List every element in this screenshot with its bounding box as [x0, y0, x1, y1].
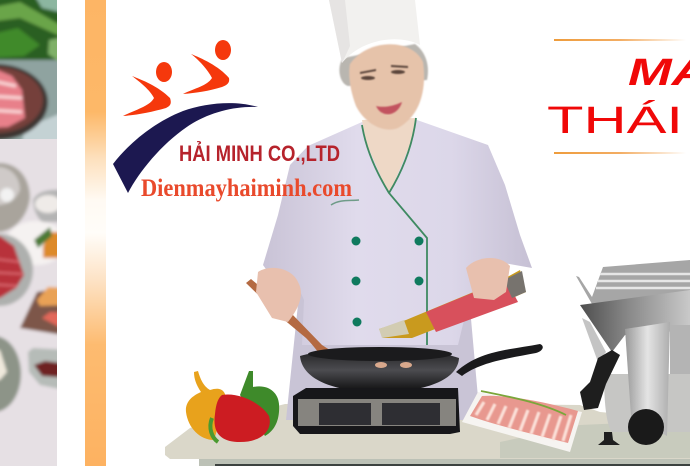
icon: navy swoosh [113, 103, 258, 193]
hat [329, 0, 420, 63]
decorative orange bar [85, 0, 106, 466]
pepper stem [210, 418, 218, 442]
blade guard [580, 290, 690, 352]
icon: left figure [123, 62, 172, 116]
company name: HẢI MINH CO.,LTD [179, 141, 340, 166]
collar piping [362, 118, 427, 345]
hair [339, 44, 428, 86]
chef [263, 0, 532, 420]
lower ribs [582, 318, 606, 362]
table [165, 404, 690, 466]
buttons [352, 236, 424, 326]
neck [362, 118, 416, 195]
red pepper [214, 395, 270, 442]
base body [604, 374, 690, 432]
heading line two: THÁI [547, 99, 683, 142]
induction cooker [293, 388, 460, 434]
chef hands [256, 258, 510, 322]
website: Dienmayhaiminh.com [141, 175, 352, 202]
green pepper [240, 371, 279, 436]
logo text [141, 141, 352, 202]
yellow pepper [186, 371, 226, 440]
foot [598, 432, 620, 445]
logo graphic [113, 40, 258, 193]
meat slicer [576, 260, 690, 445]
black handle [580, 350, 620, 410]
icon: right figure [183, 40, 231, 94]
sliced meat tray [462, 391, 582, 452]
oil bottle [379, 270, 526, 338]
eyes [360, 65, 408, 80]
photo: hotpot table spread [0, 139, 57, 466]
ribbed plate [576, 260, 690, 304]
apron [286, 285, 480, 420]
frying pan [300, 344, 543, 392]
blade disk [670, 325, 690, 375]
carriage [625, 322, 670, 436]
peppers [186, 371, 279, 442]
photo: beef plate and greens [0, 0, 57, 139]
face [349, 44, 424, 130]
embroidery [331, 200, 359, 205]
knob [628, 409, 664, 445]
jacket [263, 120, 532, 345]
left hand [256, 268, 301, 322]
right hand [466, 258, 510, 300]
mouth [376, 102, 402, 114]
wooden spoon [246, 279, 360, 366]
product heading [547, 39, 690, 154]
